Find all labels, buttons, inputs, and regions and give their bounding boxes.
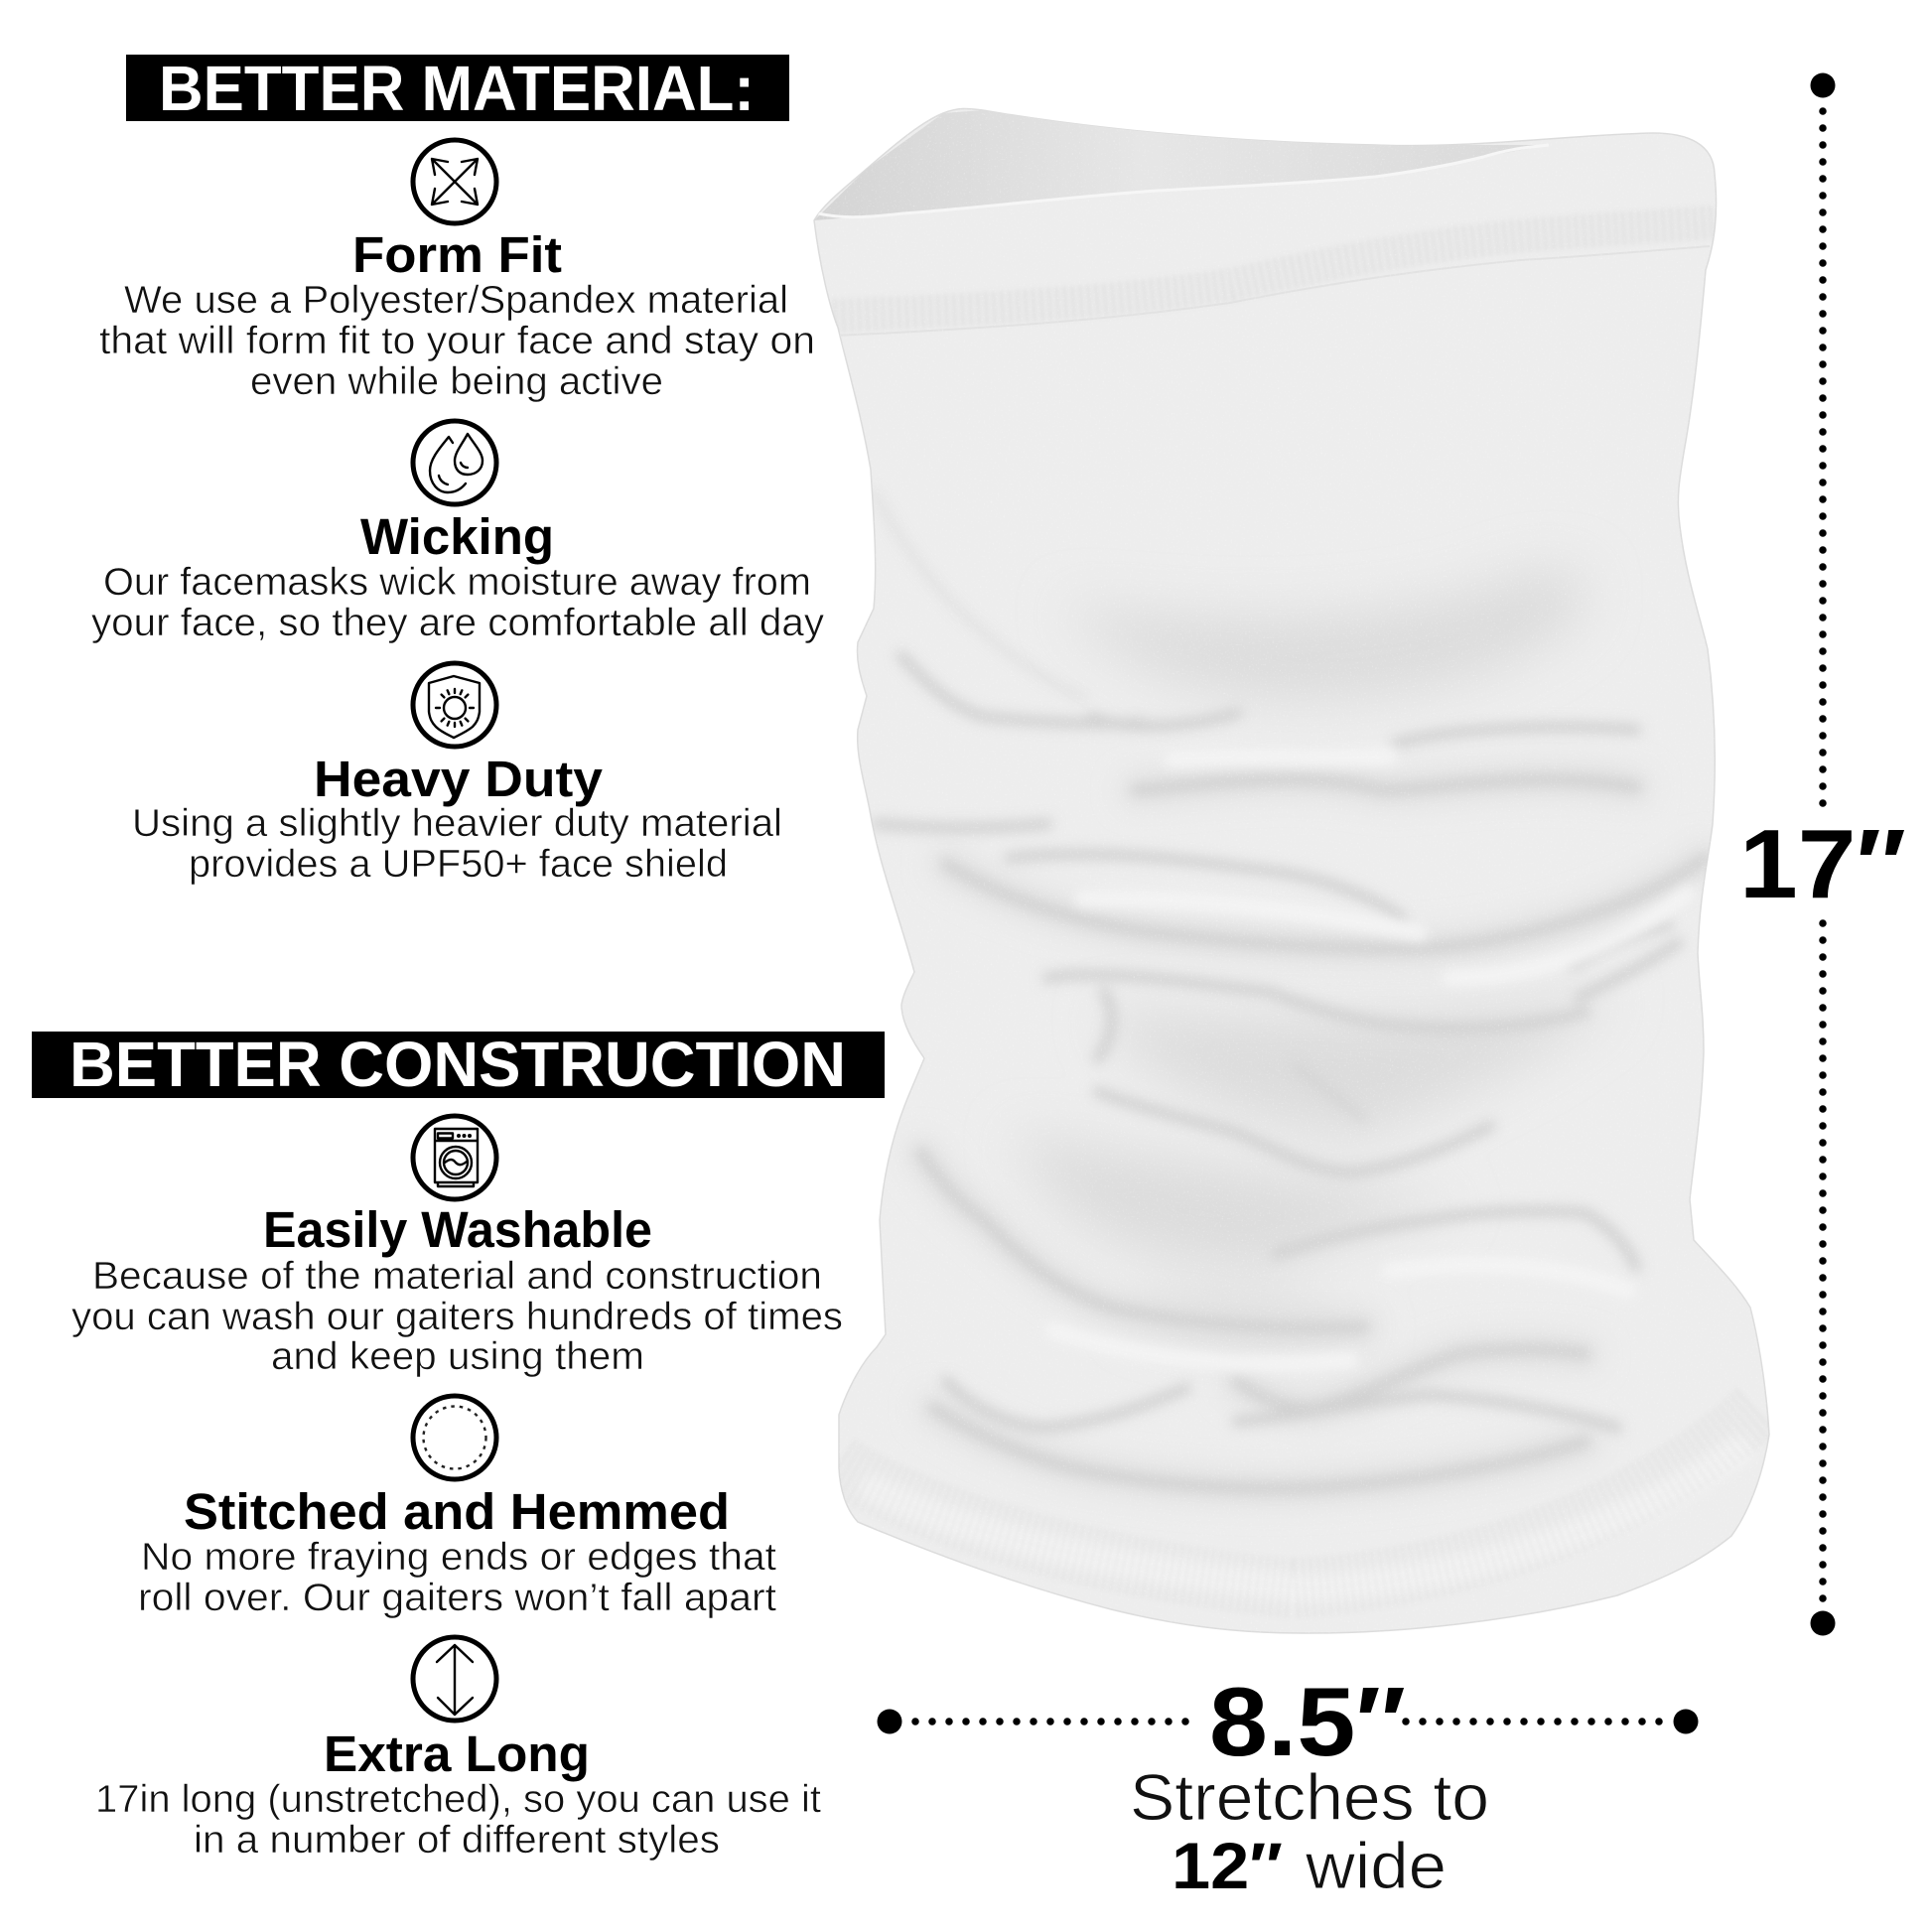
feature: easily washable bbox=[71, 1201, 843, 1378]
product image: white neck gaiter bbox=[794, 89, 1787, 1648]
feature: extra long: 17in long (unstretched), so you can use it bbox=[95, 1778, 821, 1821]
feature: wicking: Our facemasks wick moisture away from bbox=[103, 561, 811, 604]
feature: easily washable: you can wash our gaiters hundreds of times bbox=[71, 1296, 843, 1338]
top hem stitching bbox=[884, 224, 1521, 326]
caption: stretches to 12 inches wide: Stretches to bbox=[1130, 1760, 1489, 1834]
icon: wicking water drops bbox=[413, 421, 496, 504]
feature: easily washable: Because of the material and construction bbox=[92, 1255, 822, 1298]
heading banner: better construction: BETTER CONSTRUCTION bbox=[69, 1029, 846, 1100]
feature: heavy duty: Using a slightly heavier duty material bbox=[132, 802, 782, 845]
fabric speckle bbox=[794, 89, 1787, 1648]
feature: wicking: Wicking bbox=[360, 508, 554, 565]
bottom ribbed hem bbox=[1291, 1563, 1294, 1571]
measurement label 17 inches: 17″ bbox=[1739, 809, 1906, 918]
feature: easily washable: Easily Washable bbox=[263, 1201, 652, 1258]
icon: form fit arrows bbox=[413, 140, 496, 223]
feature: form fit: We use a Polyester/Spandex material bbox=[124, 279, 788, 322]
feature: form fit bbox=[99, 226, 815, 403]
dimension: 17 inch height bbox=[1739, 73, 1906, 1636]
feature: form fit: that will form fit to your face and stay on bbox=[99, 320, 815, 362]
feature: stitched and hemmed: Stitched and Hemmed bbox=[184, 1483, 730, 1540]
measurement label 8.5 inches: 8.5″ bbox=[1209, 1667, 1406, 1776]
feature: extra long: Extra Long bbox=[324, 1725, 590, 1782]
dimension: 8.5 inch width bbox=[878, 1667, 1698, 1776]
feature: stitched and hemmed: No more fraying ends or edges that bbox=[141, 1536, 776, 1579]
fabric folds bbox=[872, 650, 1708, 1495]
broad shading bbox=[1041, 574, 1574, 1279]
feature: wicking bbox=[91, 508, 825, 644]
feature: heavy duty bbox=[132, 751, 782, 886]
feature: heavy duty: provides a UPF50+ face shield bbox=[189, 843, 728, 886]
feature: wicking: your face, so they are comfortable all day bbox=[91, 602, 825, 644]
feature: easily washable: and keep using them bbox=[271, 1335, 644, 1378]
soft fold bands bbox=[921, 779, 1706, 1488]
feature: extra long: in a number of different styles bbox=[194, 1819, 720, 1862]
icon: stitched hem circle bbox=[413, 1396, 496, 1479]
feature: form fit: even while being active bbox=[250, 360, 663, 403]
feature: stitched and hemmed bbox=[138, 1483, 776, 1619]
feature: form fit: Form Fit bbox=[352, 226, 562, 283]
inner back of the collar bbox=[814, 110, 1549, 220]
icon: extra long double arrow bbox=[413, 1637, 496, 1721]
caption: stretches to 12 inches wide: 12″ bbox=[1172, 1829, 1283, 1902]
feature: stitched and hemmed: roll over. Our gaiters won’t fall apart bbox=[138, 1577, 776, 1619]
panel: better material bbox=[91, 53, 825, 886]
icon: heavy duty sun shield bbox=[413, 663, 496, 747]
caption: stretches to 12 inches wide: wide bbox=[1305, 1829, 1447, 1902]
highlights bbox=[1069, 754, 1690, 1583]
feature: extra long bbox=[95, 1725, 821, 1862]
panel: better construction bbox=[32, 1029, 885, 1862]
feature: heavy duty: Heavy Duty bbox=[314, 751, 604, 807]
caption: stretches to 12 inches wide bbox=[1130, 1760, 1489, 1902]
icon: washing machine bbox=[413, 1116, 496, 1199]
heading banner: better material: BETTER MATERIAL: bbox=[159, 53, 755, 124]
